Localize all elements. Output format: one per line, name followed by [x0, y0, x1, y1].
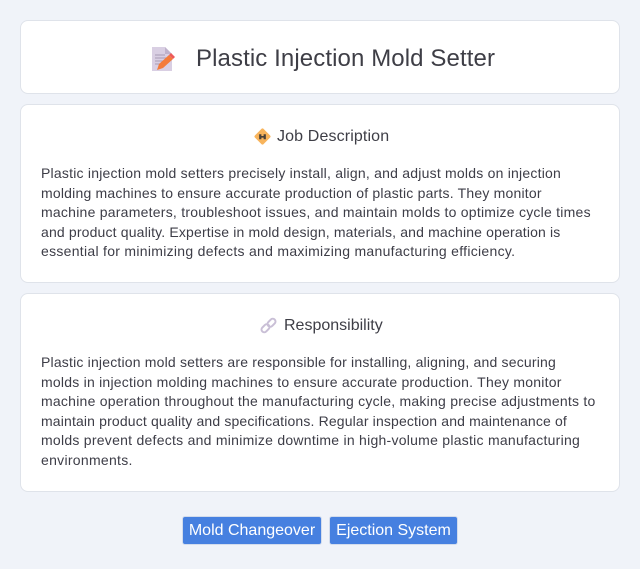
text block: responsibility: Plastic injection mold setters are responsible for installing, aligning, and securing	[41, 354, 556, 370]
icon: chain link	[260, 318, 276, 334]
text block: job description: machine parameters, troubleshoot issues, and maintain molds to optimize cycle times	[41, 204, 591, 220]
text block: responsibility: machine operation throughout the manufacturing cycle, making precise adjustments to	[41, 393, 596, 409]
tag button: ejection system: Ejection System	[336, 522, 451, 539]
tag button: ejection system	[329, 516, 458, 545]
icon: document with pencil	[152, 47, 175, 71]
text block: responsibility: molds in injection molding machines to ensure accurate production. They monitor	[41, 374, 562, 390]
text block: job description: essential for minimizing defects and maximizing manufacturing efficiency.	[41, 243, 515, 259]
text block: job description: molding machines to ensure accurate production of plastic parts. They monitor	[41, 185, 542, 201]
text block: job description: and product quality. Expertise in mold design, materials, and machine operation is	[41, 224, 560, 240]
panel: job description	[20, 104, 620, 283]
text block: job description: Plastic injection mold setters precisely install, align, and adjust molds on injection	[41, 165, 561, 181]
heading: responsibility: Responsibility	[284, 317, 383, 334]
text block: job description	[41, 165, 591, 259]
text block: responsibility: molds prevent defects and minimize downtime in high-volume plastic manufacturing	[41, 432, 580, 448]
text block: responsibility: maintain product quality and specifications. Regular inspection and maintenance of	[41, 413, 567, 429]
title: Plastic Injection Mold Setter	[196, 45, 495, 72]
text block: responsibility	[41, 354, 596, 468]
tag button: mold changeover	[182, 516, 322, 545]
icon: orange diamond sign	[254, 128, 271, 145]
text block: responsibility: environments.	[41, 452, 133, 468]
tag button: mold changeover: Mold Changeover	[189, 522, 315, 539]
panel: title card	[20, 20, 620, 94]
heading: job description: Job Description	[277, 128, 389, 145]
panel: responsibility	[20, 293, 620, 492]
